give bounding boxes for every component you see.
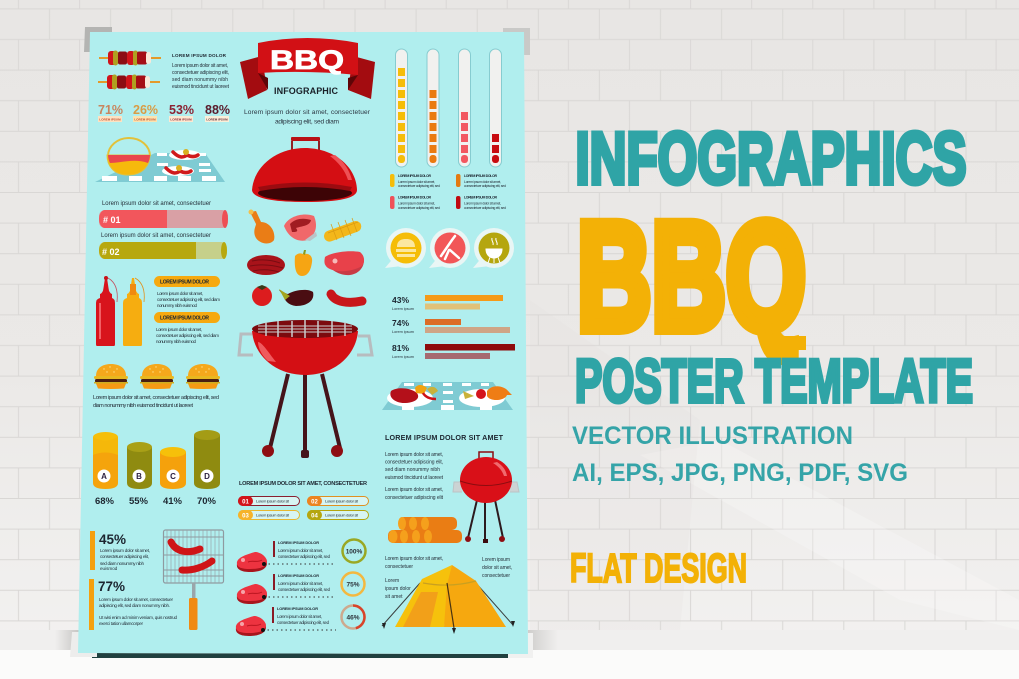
numbered list: Lorem ipsum dolor sit	[256, 498, 290, 504]
burger text	[93, 395, 219, 409]
food: steak, pepper, red meat	[247, 250, 364, 276]
tent text: consectetuer	[385, 564, 413, 570]
small grill text: consectetuer adipiscing elit,	[385, 460, 443, 466]
tent text: sit amet	[385, 594, 403, 600]
main grill	[239, 320, 372, 458]
BBQ ribbon title: BBQ	[270, 45, 344, 75]
numbered list: Lorem ipsum dolor sit	[256, 512, 290, 518]
horizontal bar stats	[392, 295, 515, 359]
numbered list: Lorem ipsum dolor sit	[325, 512, 359, 518]
cylinder chart: C	[170, 472, 176, 481]
stat 77%: Lorem ipsum dolor sit amet, consectetuer	[99, 597, 173, 602]
poster: BBQ infographic	[78, 32, 528, 654]
cylinder chart: 70%	[197, 496, 217, 507]
numbered list: 02	[311, 500, 318, 506]
cylinder chart: A	[101, 472, 107, 481]
labelled sauce notes: LOREM IPSUM DOLOR	[160, 316, 209, 322]
tent text: Lorem ipsum dolor sit amet,	[385, 556, 443, 562]
small grill text: euismod tincidunt ut laoreet	[385, 475, 444, 481]
small grill text	[385, 452, 444, 501]
stat 45%: Lorem ipsum dolor sit amet,	[100, 548, 150, 553]
burger text: Lorem ipsum dolor sit amet, consectetuer adipiscing elit, sed	[93, 395, 219, 401]
cylinder chart: 41%	[163, 496, 183, 507]
numbered list: 04	[311, 514, 318, 520]
stat 77%: 77%	[98, 579, 125, 594]
headline: BBQ	[577, 191, 806, 362]
picnic plates	[382, 382, 513, 410]
grill lid	[252, 137, 357, 202]
progress bars 01 and 02: # 01	[103, 215, 121, 225]
cylinder chart	[93, 430, 220, 507]
kebab text block: consectetuer adipiscing elit,	[172, 70, 229, 76]
progress bars 01 and 02	[99, 201, 228, 259]
tagline: flat design: FLAT DESIGN	[570, 545, 747, 591]
labelled sauce notes	[154, 276, 220, 344]
steak rows with donuts	[236, 540, 366, 636]
steak rows with donuts: consectetuer adipiscing elit, sed	[277, 620, 330, 625]
test tube chart	[396, 49, 502, 167]
tube legend: LOREM IPSUM DOLOR	[464, 174, 497, 178]
small grill text: Lorem ipsum dolor sit amet,	[385, 452, 443, 458]
kebab skewers	[98, 50, 161, 90]
tent text: dolor sit amet,	[482, 565, 512, 571]
horizontal bar stats: 81%	[392, 343, 409, 353]
picnic with basket	[95, 138, 225, 182]
labelled sauce notes: nonummy nibh euismod	[156, 339, 196, 344]
small grill text: sed diam nonummy nibh	[385, 467, 440, 473]
four percentages	[98, 103, 230, 122]
four percentages: 88%	[205, 103, 230, 117]
subheading: file formats: AI, EPS, JPG, PNG, PDF, SVG	[572, 459, 908, 487]
poster clips	[70, 27, 533, 658]
small grill text: consectetuer adipiscing elit	[385, 495, 444, 501]
numbered list: LOREM IPSUM DOLOR SIT AMET, CONSECTETUER	[239, 481, 367, 487]
headline: BBQ: BBQ	[577, 191, 806, 362]
tube legend: consectetuer adipiscing elit, sed	[464, 184, 506, 188]
stat 45%	[90, 531, 150, 571]
steak rows with donuts: Lorem ipsum dolor sit amet,	[278, 581, 323, 586]
steak rows with donuts: Lorem ipsum dolor sit amet,	[277, 614, 322, 619]
subtitle and intro: INFOGRAPHIC	[274, 86, 338, 96]
stat 45%: 45%	[99, 532, 126, 547]
cylinder chart: 68%	[95, 496, 115, 507]
steak rows with donuts: 75%	[346, 582, 360, 588]
burgers	[94, 364, 220, 389]
horizontal bar stats: Lorem ipsum	[392, 307, 414, 311]
horizontal bar stats: Lorem ipsum	[392, 330, 414, 334]
cylinder chart: 55%	[129, 496, 149, 507]
numbered list: 03	[242, 514, 249, 520]
labelled sauce notes: nonummy nibh euismod	[157, 303, 197, 308]
numbered list: 01	[242, 500, 249, 506]
tube legend: LOREM IPSUM DOLOR	[464, 196, 497, 200]
progress bars 01 and 02: Lorem ipsum dolor sit amet, consectetuer	[101, 233, 211, 239]
kebab text block: Lorem ipsum dolor sit amet,	[172, 63, 228, 69]
labelled sauce notes: consectetuer adipiscing elit, sed diam	[156, 333, 219, 338]
small grill text: Lorem ipsum dolor sit amet,	[385, 487, 443, 493]
tube legend: consectetuer adipiscing elit, sed	[464, 206, 506, 210]
kebab text block: LOREM IPSUM DOLOR	[172, 53, 227, 58]
labelled sauce notes: Lorem ipsum dolor sit amet,	[156, 327, 202, 332]
stat 77%: exerci tation ullamcorper	[99, 621, 143, 626]
icon badges	[385, 228, 514, 268]
sauce bottles	[96, 276, 144, 346]
steak rows with donuts: LOREM IPSUM DOLOR	[278, 573, 319, 578]
BBQ ribbon title	[240, 38, 375, 99]
stat 45%: euismod	[100, 566, 118, 571]
stat 77%: Ut wisi enim ad minim veniam, quis nostrud	[99, 615, 177, 620]
horizontal bar stats: Lorem ipsum	[392, 355, 414, 359]
labelled sauce notes: consectetuer adipiscing elit, sed diam	[157, 297, 220, 302]
four percentages: LOREM IPSUM	[206, 118, 228, 122]
tube legend	[390, 174, 506, 210]
stat 77%: adipiscing elit, sed diam nonummy nibh.	[99, 603, 170, 608]
cylinder chart: B	[136, 472, 142, 481]
four percentages: 71%	[98, 103, 123, 117]
subtitle and intro	[244, 86, 371, 126]
steak rows with donuts: LOREM IPSUM DOLOR	[277, 606, 318, 611]
stat 45%: sed diam nonummy nibh	[100, 561, 144, 566]
tube legend: LOREM IPSUM DOLOR	[398, 196, 431, 200]
labelled sauce notes: Lorem ipsum dolor sit amet,	[157, 291, 203, 296]
cylinder chart: D	[204, 472, 210, 481]
small kettle grill	[453, 452, 519, 543]
numbered list: Lorem ipsum dolor sit	[325, 498, 359, 504]
grill grate with sausages	[163, 530, 224, 630]
steak rows with donuts: consectetuer adipiscing elit, sed	[278, 554, 331, 559]
steak rows with donuts: 46%	[346, 614, 360, 622]
grill and tent heading: LOREM IPSUM DOLOR SIT AMET	[385, 433, 504, 442]
tube legend: Lorem ipsum dolor sit amet,	[398, 202, 435, 206]
subtitle and intro: Lorem ipsum dolor sit amet, consectetuer	[244, 109, 371, 116]
progress bars 01 and 02: Lorem ipsum dolor sit amet, consectetuer	[102, 201, 211, 207]
tent	[382, 565, 515, 634]
steak rows with donuts: LOREM IPSUM DOLOR	[278, 540, 319, 545]
tent text: Lorem	[385, 578, 399, 584]
subtitle and intro: adipiscing elit, sed diam	[275, 118, 340, 126]
kebab text block: euismod tincidunt ut laoreet	[172, 84, 230, 90]
horizontal bar stats: 43%	[392, 295, 409, 305]
four percentages: 53%	[169, 103, 194, 117]
four percentages: 26%	[133, 103, 158, 117]
tube legend: consectetuer adipiscing elit, sed	[398, 184, 440, 188]
kebab text block	[172, 53, 230, 90]
poster shadow	[92, 653, 512, 658]
burger text: diam nonummy nibh euismod tincidunt ut laoreet	[93, 403, 193, 409]
tent text: consectetuer	[482, 573, 510, 579]
tube legend: consectetuer adipiscing elit, sed	[398, 206, 440, 210]
tube legend: Lorem ipsum dolor sit amet,	[398, 180, 435, 184]
steak rows with donuts: consectetuer adipiscing elit, sed	[278, 587, 331, 592]
food: tomato, eggplant, sausage	[252, 285, 362, 306]
tent text: ipsum dolor	[385, 586, 411, 592]
steak rows with donuts: 100%	[346, 548, 363, 556]
stat 45%: consectetuer adipiscing elit,	[100, 554, 149, 559]
tube legend: LOREM IPSUM DOLOR	[398, 174, 431, 178]
numbered list	[238, 481, 368, 520]
tube legend: Lorem ipsum dolor sit amet,	[464, 180, 501, 184]
tent text: Lorem ipsum	[482, 557, 510, 563]
steak rows with donuts: Lorem ipsum dolor sit amet,	[278, 548, 323, 553]
kebab text block: sed diam nonummy nibh	[172, 77, 228, 83]
log pile	[388, 517, 462, 543]
four percentages: LOREM IPSUM	[134, 118, 156, 122]
labelled sauce notes: LOREM IPSUM DOLOR	[160, 280, 209, 286]
horizontal bar stats: 74%	[392, 318, 409, 328]
stat 77%	[89, 579, 177, 630]
progress bars 01 and 02: # 02	[102, 247, 120, 257]
four percentages: LOREM IPSUM	[170, 118, 192, 122]
subheading: vector illustration: VECTOR ILLUSTRATION	[572, 422, 853, 450]
four percentages: LOREM IPSUM	[99, 118, 121, 122]
tent text	[385, 556, 512, 600]
tube legend: Lorem ipsum dolor sit amet,	[464, 202, 501, 206]
food: chicken, salmon, corn	[248, 210, 363, 243]
